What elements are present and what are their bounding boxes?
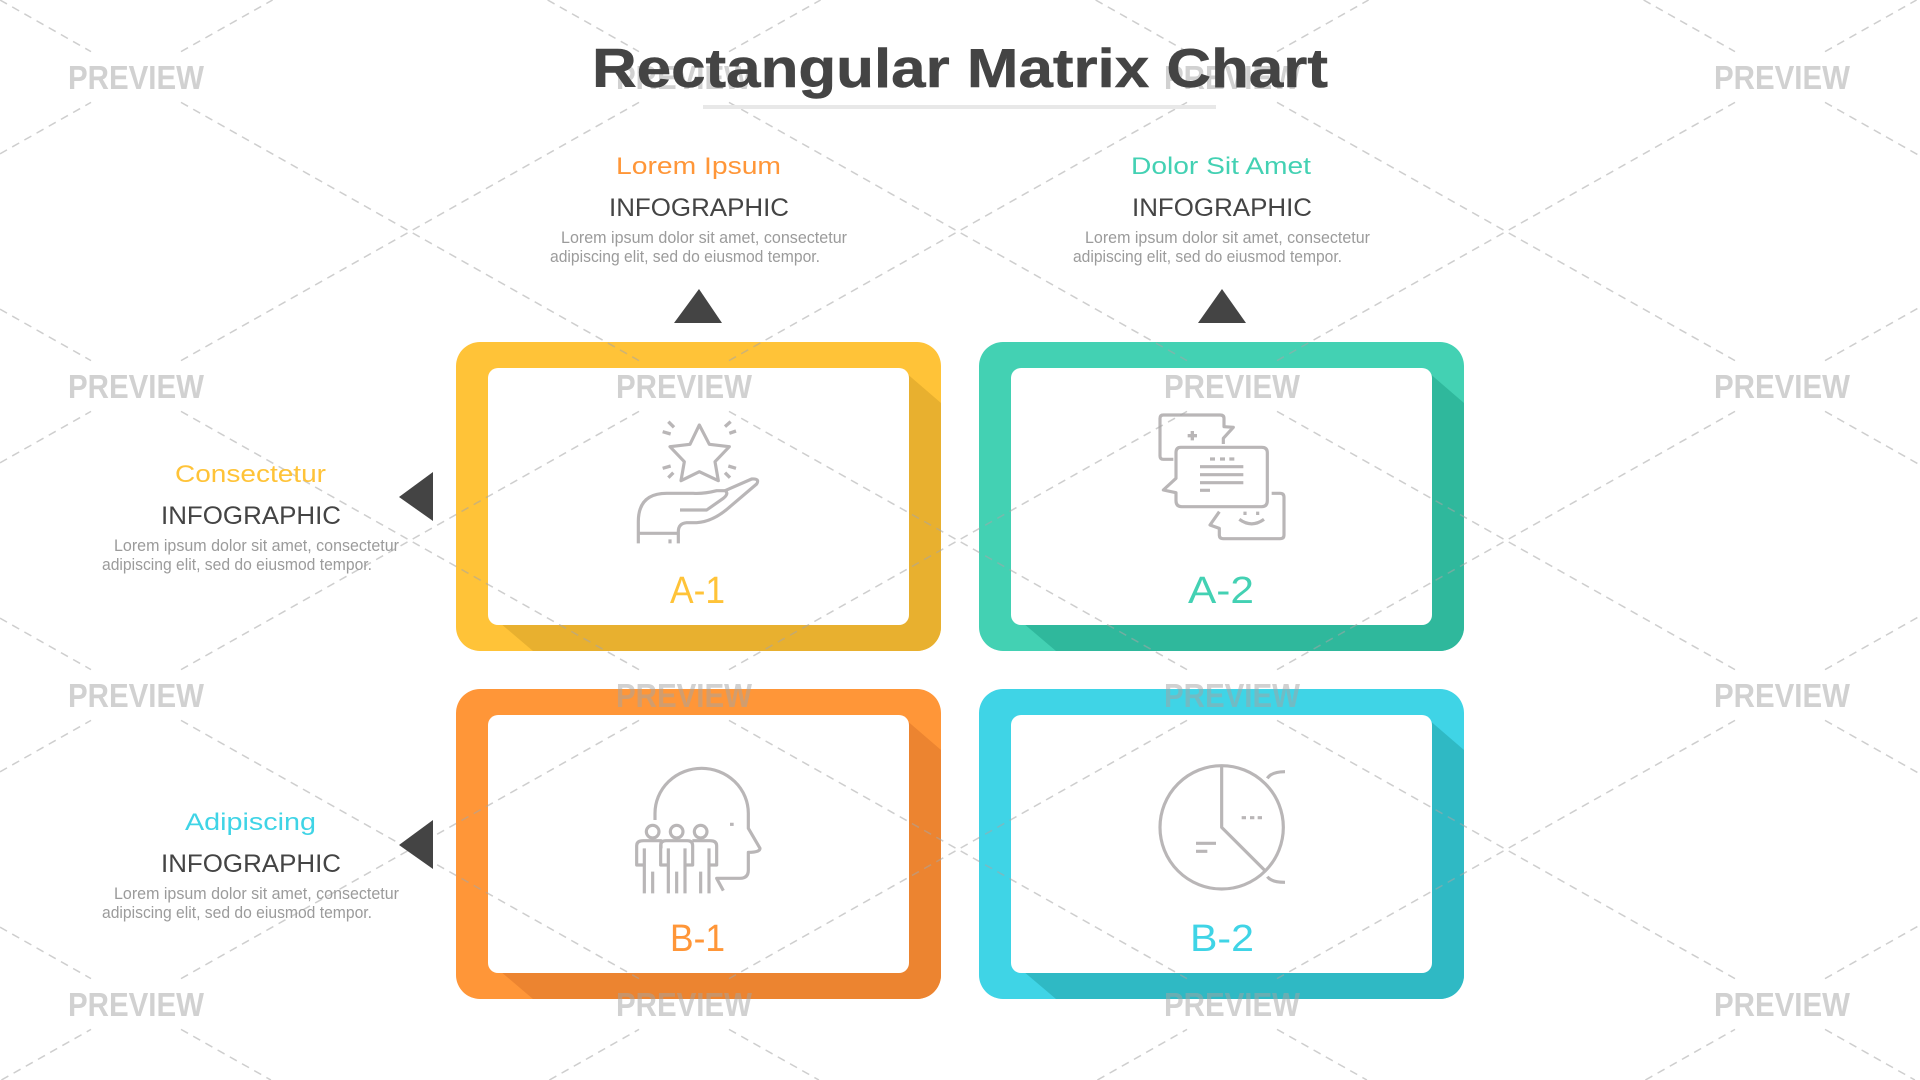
- watermark: PREVIEW: [1714, 368, 1851, 405]
- arrow: left, row B: [399, 820, 433, 869]
- watermark: PREVIEW: [616, 59, 753, 96]
- arrow: up, column A: [674, 289, 722, 323]
- watermark: PREVIEW: [1714, 677, 1851, 714]
- watermark: PREVIEW: [1714, 986, 1851, 1023]
- icon: pie chart: [1160, 766, 1285, 889]
- watermark: PREVIEW: [1164, 368, 1301, 405]
- text block: Lorem Ipsum column: INFOGRAPHIC: [609, 194, 789, 222]
- watermark: PREVIEW: [68, 986, 205, 1023]
- arrow: up, column B: [1198, 289, 1246, 323]
- text block: Lorem Ipsum column: Lorem ipsum dolor sit amet, consectetur: [561, 229, 847, 247]
- text block: Adipiscing row: INFOGRAPHIC: [161, 850, 341, 878]
- text block: Adipiscing row: [102, 809, 399, 922]
- panel: card A-2 frame: [979, 342, 1464, 651]
- watermark: PREVIEW: [68, 368, 205, 405]
- card label A-1: A-1: [670, 570, 725, 612]
- watermark: PREVIEW: [616, 368, 753, 405]
- watermark: PREVIEW: [616, 986, 753, 1023]
- text block: Dolor Sit Amet column: INFOGRAPHIC: [1132, 194, 1312, 222]
- text block: Adipiscing row: adipiscing elit, sed do eiusmod tempor.: [102, 904, 372, 922]
- text block: Consectetur row: Lorem ipsum dolor sit amet, consectetur: [114, 537, 399, 555]
- text block: Consectetur row: Consectetur: [175, 461, 326, 488]
- card label B-1: B-1: [670, 918, 725, 960]
- arrow: left, row A: [399, 472, 433, 521]
- text block: Lorem Ipsum column: Lorem Ipsum: [616, 153, 781, 180]
- text block: Adipiscing row: Lorem ipsum dolor sit amet, consectetur: [114, 885, 399, 903]
- icon: hand holding star: [638, 422, 758, 543]
- watermark: PREVIEW: [616, 677, 753, 714]
- card label A-2: A-2: [1188, 570, 1254, 612]
- icon: head with people: [637, 768, 760, 893]
- text block: Consectetur row: INFOGRAPHIC: [161, 502, 341, 530]
- text block: Consectetur row: adipiscing elit, sed do eiusmod tempor.: [102, 556, 372, 574]
- watermark: PREVIEW: [1164, 677, 1301, 714]
- panel: card B-2 frame: [979, 689, 1464, 999]
- panel: card B-1 frame: [456, 689, 941, 999]
- title: Rectangular Matrix Chart: [592, 37, 1328, 99]
- text block: Lorem Ipsum column: adipiscing elit, sed do eiusmod tempor.: [550, 248, 820, 266]
- icon: chat bubbles: [1160, 415, 1284, 539]
- text block: Dolor Sit Amet column: adipiscing elit, sed do eiusmod tempor.: [1073, 248, 1342, 266]
- watermark: PREVIEW: [1164, 986, 1301, 1023]
- text block: Dolor Sit Amet column: Dolor Sit Amet: [1131, 153, 1311, 180]
- text block: Consectetur row: [102, 461, 399, 574]
- watermark: PREVIEW: [1714, 59, 1851, 96]
- text block: Dolor Sit Amet column: Lorem ipsum dolor sit amet, consectetur: [1085, 229, 1370, 247]
- title underline: [703, 105, 1216, 109]
- watermark: PREVIEW: [1164, 59, 1301, 96]
- watermark: PREVIEW: [68, 59, 205, 96]
- text block: Adipiscing row: Adipiscing: [185, 809, 316, 836]
- card label B-2: B-2: [1190, 918, 1254, 960]
- text block: Lorem Ipsum column: [550, 153, 847, 266]
- watermark: PREVIEW: [68, 677, 205, 714]
- panel: card A-1 frame: [456, 342, 941, 651]
- text block: Dolor Sit Amet column: [1073, 153, 1370, 266]
